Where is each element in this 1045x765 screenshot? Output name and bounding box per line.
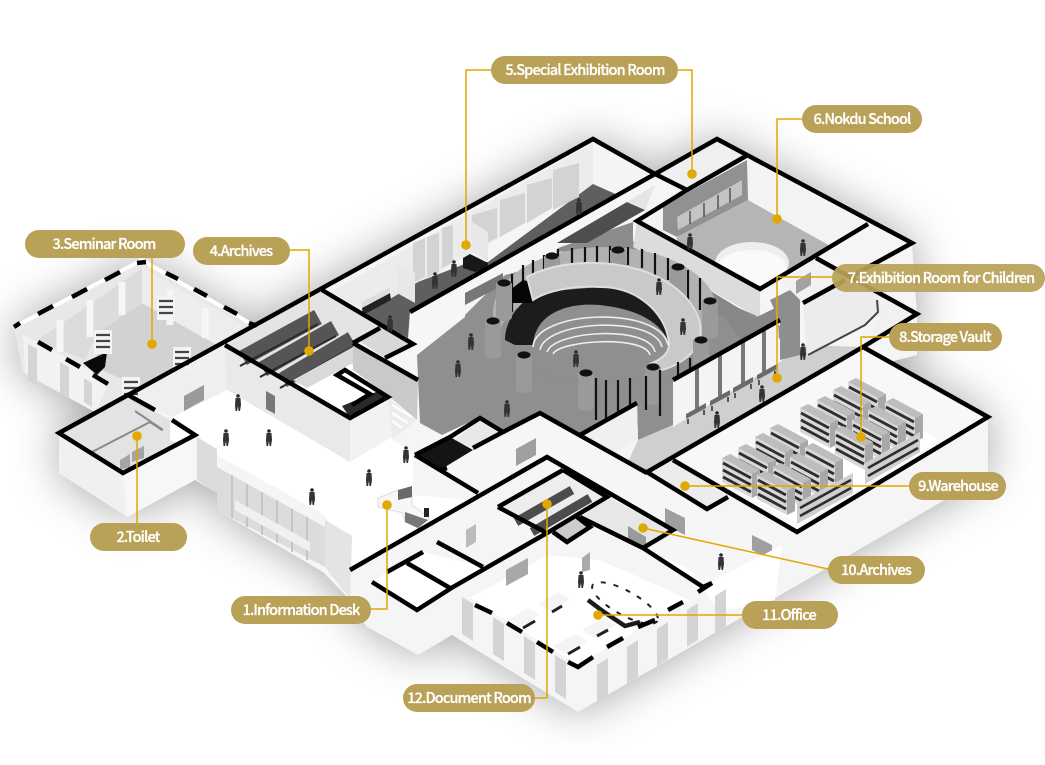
reception desk bbox=[378, 486, 430, 528]
label: 7 exhibition room for children: 7.Exhibition Room for Children bbox=[848, 267, 1034, 288]
label: 3 seminar room: 3.Seminar Room bbox=[52, 233, 156, 254]
children exhibition corridor bbox=[628, 258, 917, 472]
label: 10 archives: 10.Archives bbox=[841, 559, 912, 580]
label: 11 office bbox=[742, 601, 838, 629]
balcony ring bbox=[527, 263, 701, 372]
nokdu school bbox=[637, 139, 868, 290]
seminar dashed outline bbox=[14, 260, 253, 327]
archives 4 room bbox=[225, 290, 388, 418]
black closet bbox=[415, 437, 473, 470]
office furniture bbox=[508, 575, 663, 654]
label: 9 warehouse bbox=[909, 472, 1006, 500]
central lobby floor bbox=[417, 240, 790, 440]
benches bbox=[686, 364, 777, 424]
label: 2 toilet bbox=[90, 523, 187, 551]
wall below special exhibition bbox=[408, 174, 655, 355]
label: 5 special exhibition room bbox=[491, 56, 678, 84]
label: 11 office: 11.Office bbox=[762, 604, 816, 625]
label: 12 document room: 12.Document Room bbox=[407, 687, 531, 708]
black stair bbox=[505, 280, 543, 303]
amphitheatre steps bbox=[533, 317, 668, 355]
label: 4 archives bbox=[193, 237, 290, 265]
racks bbox=[722, 378, 923, 515]
label: 7 exhibition room for children bbox=[832, 264, 1045, 292]
atrium bbox=[485, 246, 718, 420]
label: 1 information desk: 1.Information Desk bbox=[242, 599, 361, 620]
dark balcony shadow bbox=[505, 287, 668, 345]
seminar black screen bbox=[83, 352, 107, 375]
label: 1 information desk bbox=[231, 596, 371, 624]
people bbox=[223, 198, 806, 588]
toilet bbox=[59, 395, 195, 517]
label: 6 nokdu school: 6.Nokdu School bbox=[813, 108, 911, 129]
white lobby floor bbox=[173, 390, 470, 570]
office facade windows bbox=[462, 589, 726, 702]
black walls bbox=[59, 139, 988, 667]
small room by closet bbox=[455, 420, 503, 448]
nokdu outer wall bbox=[633, 222, 760, 318]
warehouse bbox=[647, 460, 728, 509]
glass entrance facade bbox=[197, 437, 352, 598]
document and office block bbox=[372, 413, 797, 665]
staircase bbox=[353, 345, 418, 440]
label: 9 warehouse: 9.Warehouse bbox=[918, 475, 999, 496]
end racks bbox=[797, 432, 920, 524]
label: 8 storage vault bbox=[889, 323, 1002, 351]
storage vault bbox=[673, 347, 988, 532]
label: 8 storage vault: 8.Storage Vault bbox=[899, 326, 992, 347]
label: 4 archives: 4.Archives bbox=[210, 240, 273, 261]
leader lines and dots bbox=[132, 70, 909, 698]
label: 5 special exhibition room: 5.Special Exhibition Room bbox=[505, 59, 665, 80]
label: 10 archives bbox=[828, 556, 925, 584]
lobby back wall bbox=[133, 345, 390, 462]
label: 3 seminar room bbox=[25, 230, 185, 258]
small rooms upper centre bbox=[355, 327, 413, 358]
seminar bookcases bbox=[94, 296, 191, 401]
columns front bbox=[485, 279, 709, 411]
front ring stripes bbox=[596, 358, 690, 420]
seminar room bbox=[14, 260, 257, 412]
wall face lower lobby bbox=[580, 403, 638, 462]
columns rear bbox=[544, 246, 718, 339]
building base bbox=[14, 139, 988, 712]
rear ring wall bbox=[493, 247, 717, 377]
special exhibition room bbox=[330, 143, 652, 338]
label: 2 toilet: 2.Toilet bbox=[116, 526, 161, 547]
drop shadow bbox=[14, 139, 988, 712]
label: 6 nokdu school bbox=[802, 105, 922, 133]
ramp behind atrium bbox=[465, 185, 655, 305]
